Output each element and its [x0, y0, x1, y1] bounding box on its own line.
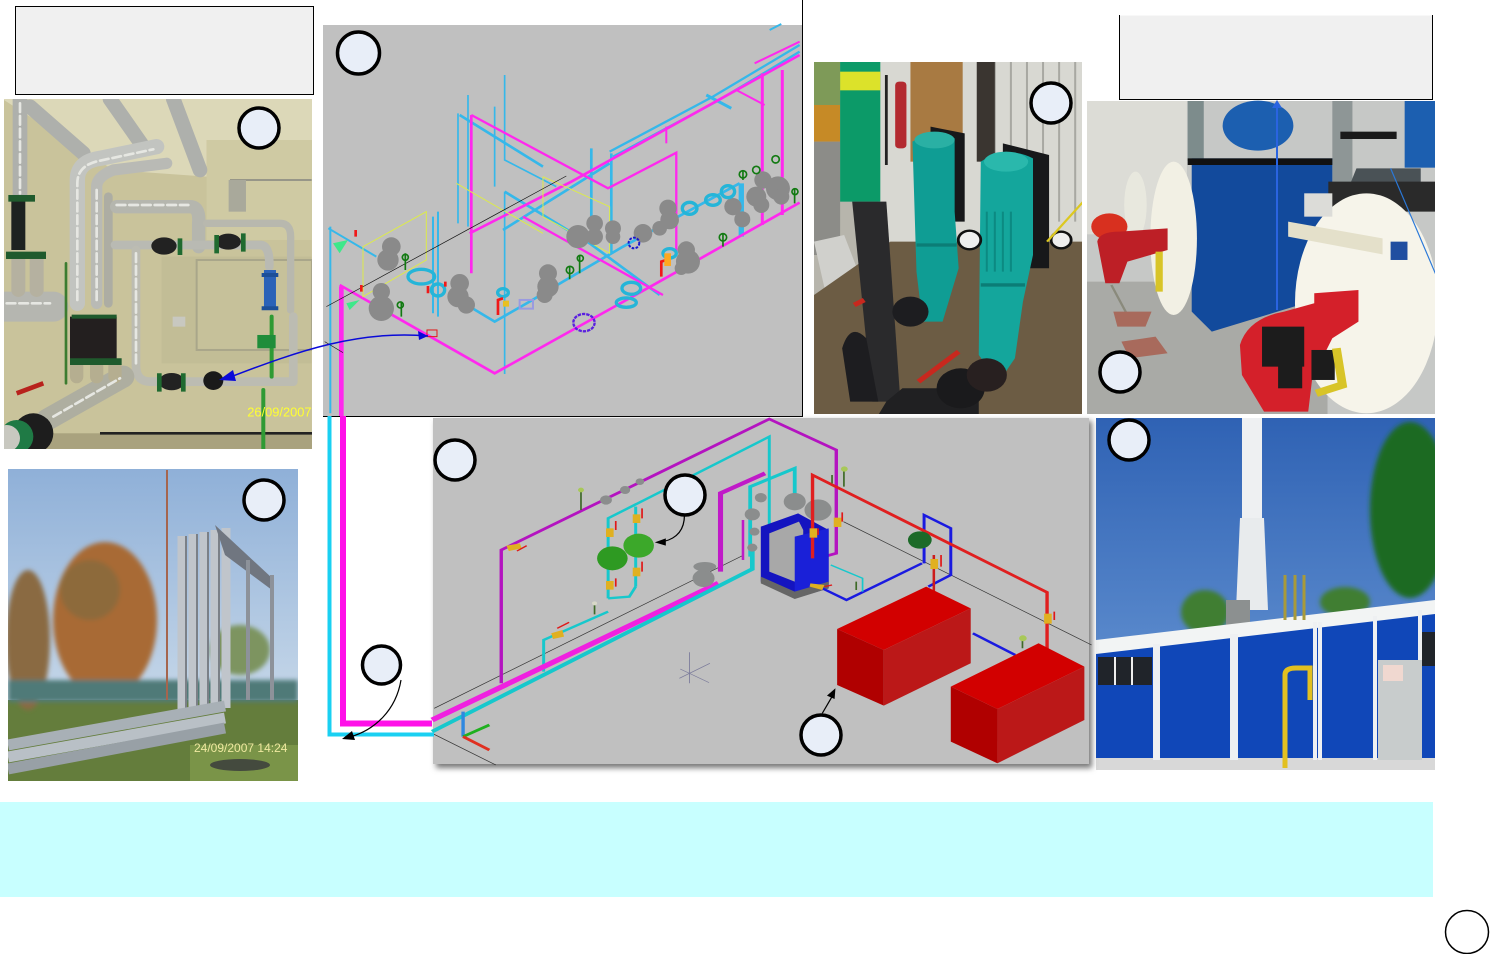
note box: top right — [1120, 16, 1432, 100]
number markers — [239, 32, 1149, 755]
compass symbols — [679, 652, 710, 683]
photo: insulated pipework in room — [0, 99, 312, 453]
red and orange fittings — [356, 230, 666, 315]
marker: pumps photo — [1031, 83, 1071, 123]
photo: insulated pipework in room: 26/09/2007 — [247, 405, 312, 420]
blue circuit — [822, 515, 1015, 655]
yellow fittings — [506, 514, 1052, 639]
marker: boiler photo — [1100, 352, 1140, 392]
red storage tanks — [837, 587, 1084, 763]
arrow: valve drawing to photo — [219, 331, 428, 381]
arrow: boiler to note — [1272, 100, 1282, 310]
green spring mounts — [333, 240, 360, 310]
photo: above-ground pipeline — [6, 469, 298, 781]
purple loop — [501, 419, 836, 683]
frame lines of upper drawing — [323, 0, 802, 416]
photo: boilers with burners — [1086, 101, 1438, 415]
cyan small loop — [544, 437, 769, 672]
pipe highlights — [7, 103, 188, 417]
yellow-green frames — [363, 177, 610, 297]
arrow: callout to connecting pipes — [342, 680, 401, 740]
drawing panel: upper piping isometric — [323, 24, 802, 417]
callout arrow: to pump — [663, 515, 684, 542]
photo: above-ground pipeline: 24/09/2007 14:24 — [194, 741, 288, 755]
marker: chimney photo — [1109, 420, 1149, 460]
cyan handwheels — [408, 186, 735, 307]
blue and violet valves — [629, 238, 639, 248]
callout arrow: to tank — [822, 697, 832, 713]
marker: connecting pipes — [362, 646, 400, 684]
magenta pipe network — [340, 42, 800, 417]
drawing panel: lower heat-exchanger isometric — [432, 418, 1092, 768]
marker: upper drawing — [338, 32, 380, 74]
information band — [0, 802, 1433, 897]
green circulation pumps — [597, 531, 932, 570]
photo: circulation pumps — [814, 62, 1083, 415]
grey valve clusters — [369, 171, 790, 321]
red circuit — [813, 475, 1047, 662]
connecting pipe: cyan — [330, 416, 434, 734]
small gauges — [581, 470, 1022, 648]
cyan pipe network — [328, 24, 800, 413]
marker: pipework photo — [239, 108, 279, 148]
marker: pipeline photo — [244, 480, 284, 520]
marker: tanks — [801, 715, 841, 755]
connecting pipe: magenta — [343, 416, 432, 724]
page number circle — [1446, 910, 1488, 954]
marker: circulation pump — [665, 475, 705, 515]
note box: top left — [16, 6, 314, 94]
photo: blue container boiler house with chimney — [1096, 418, 1450, 770]
plate heat exchanger — [761, 513, 829, 598]
marker: lower drawing — [435, 440, 475, 480]
main magenta and cyan mains — [432, 583, 718, 720]
grey gate valves — [600, 478, 832, 587]
green gauges — [397, 156, 798, 317]
